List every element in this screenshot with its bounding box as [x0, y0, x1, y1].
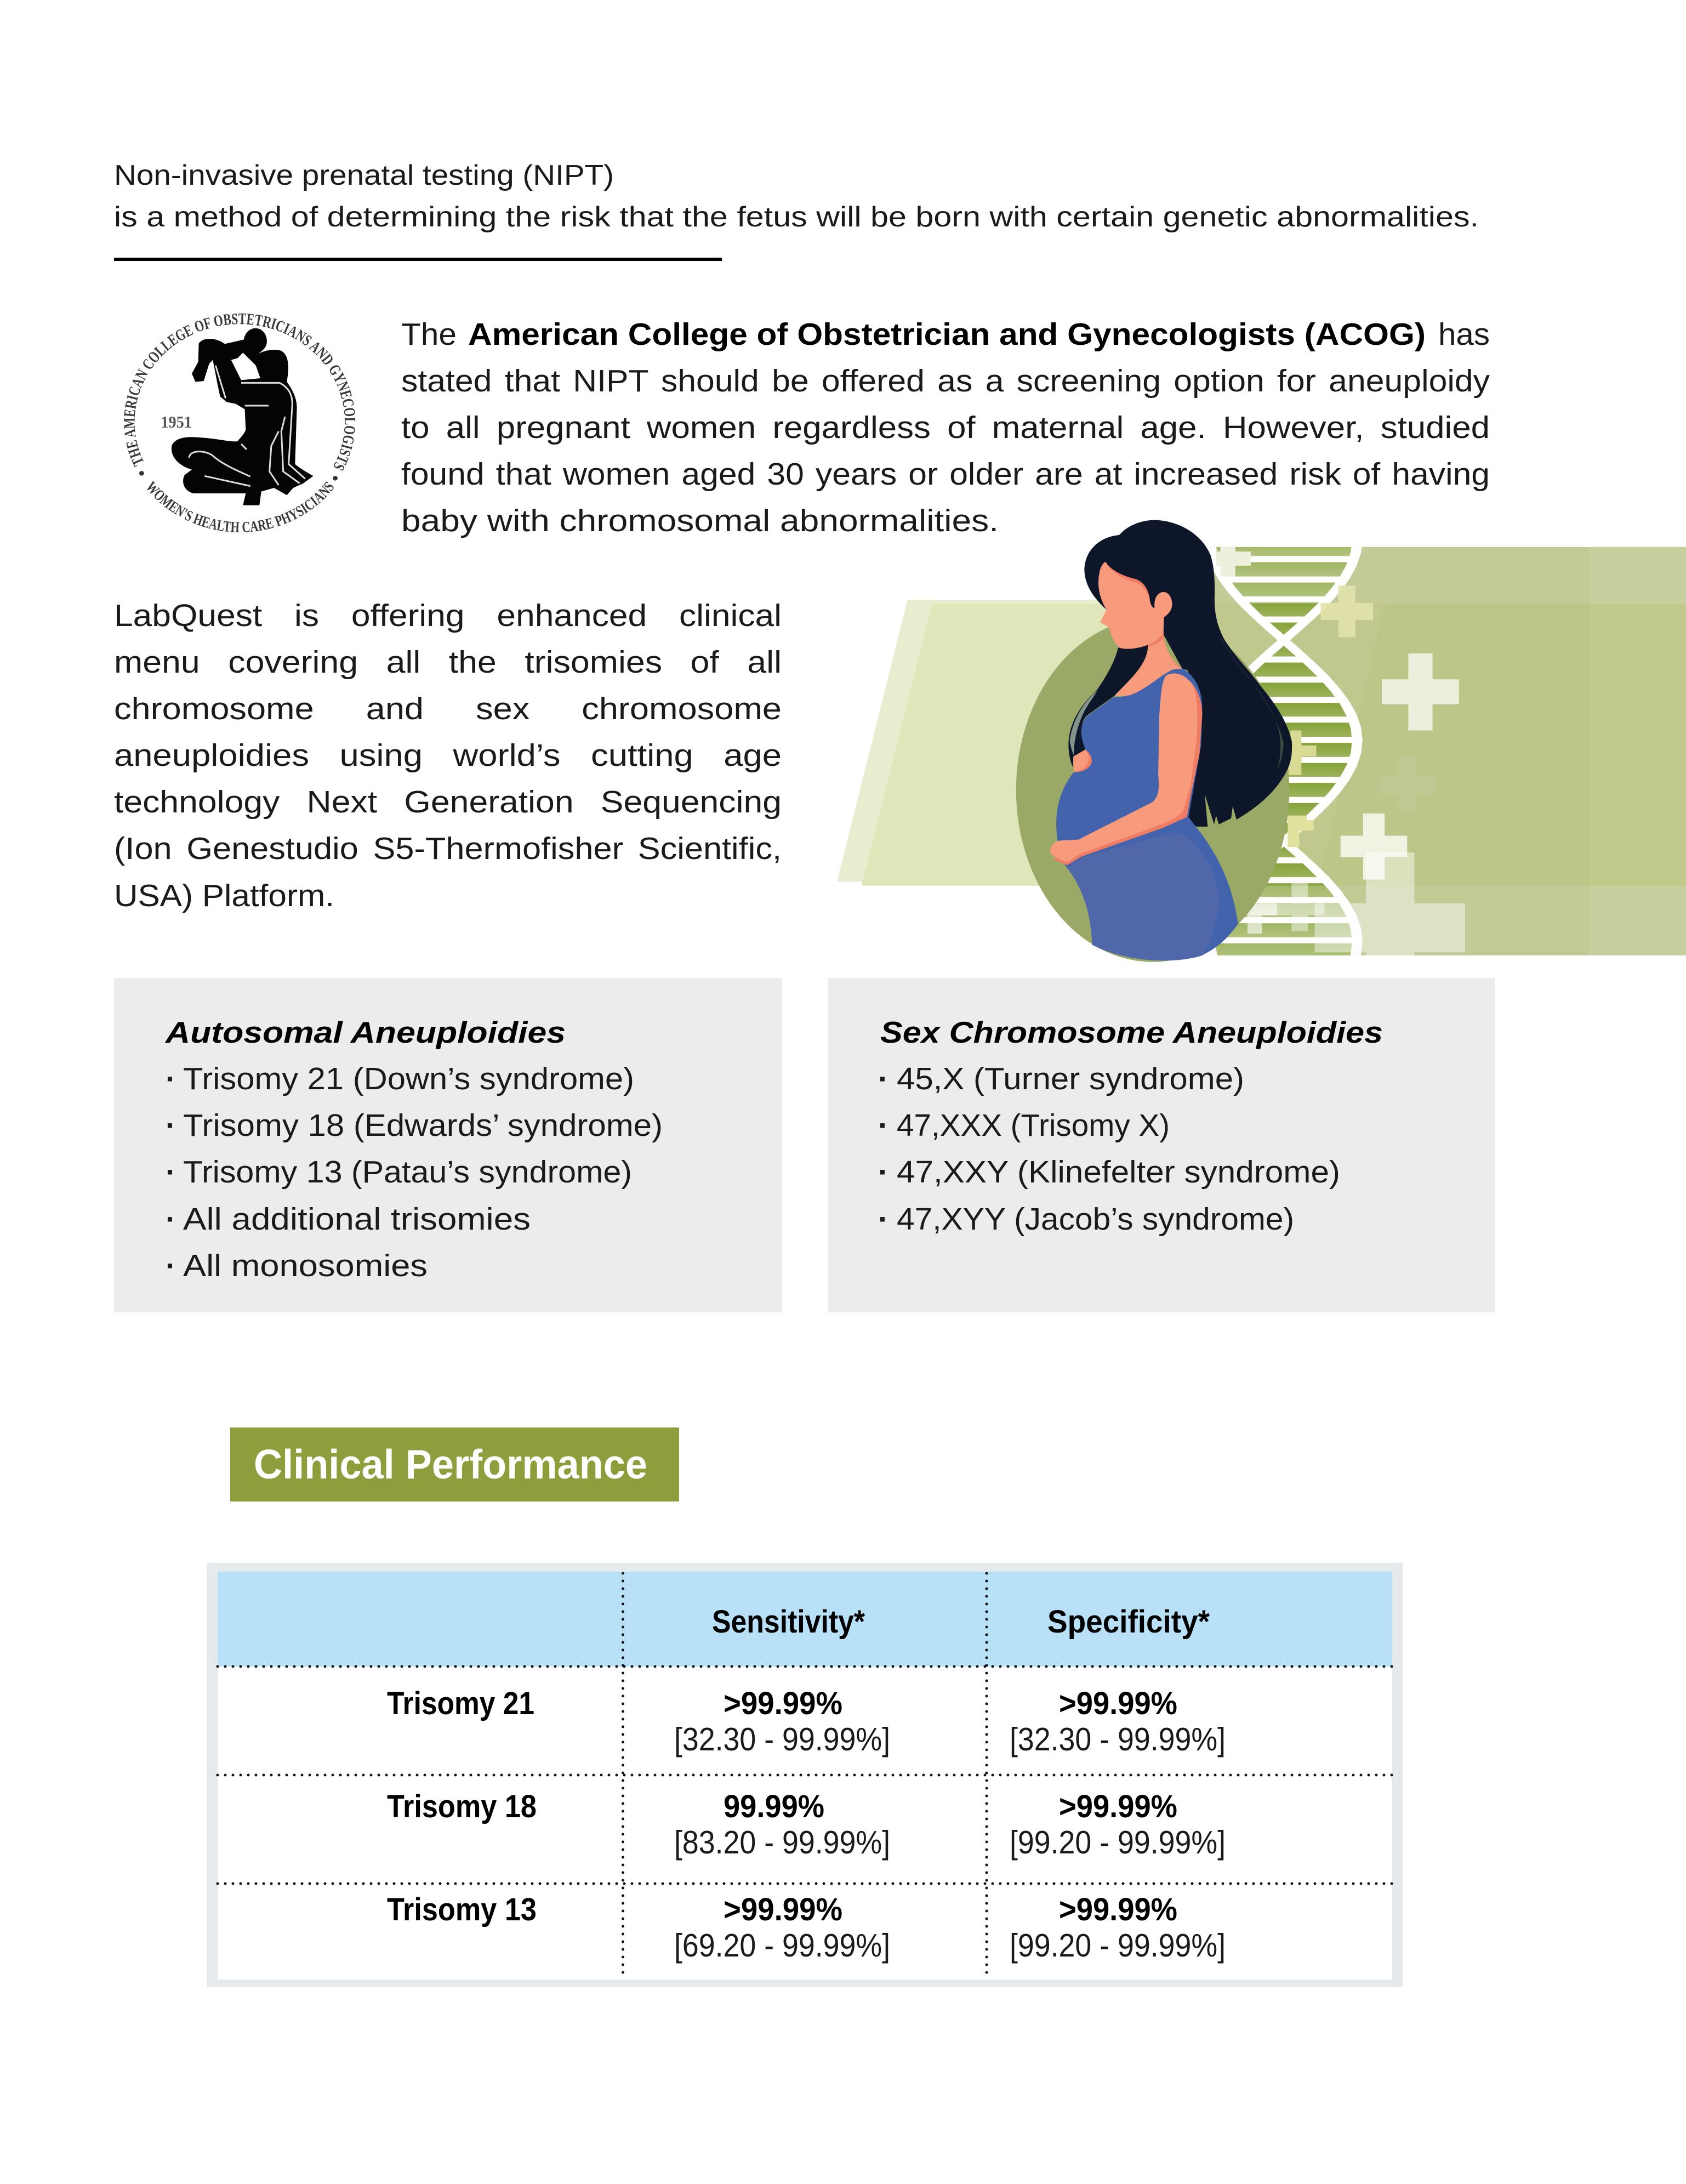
woman: dress and arm — [1050, 668, 1238, 960]
list: sex chromosome: · — [878, 1202, 888, 1237]
paragraph: ACOG statement: The — [401, 317, 457, 352]
row: trisomy 13: [69.20 - 99.99%] — [674, 1927, 890, 1964]
heading rule — [114, 258, 722, 261]
table header: Specificity* — [1047, 1604, 1210, 1640]
heading: autosomal: Autosomal Aneuploidies — [164, 1015, 566, 1049]
paragraph: LabQuest menu — [114, 598, 782, 913]
heading: clinical performance: Clinical Performance — [254, 1441, 647, 1487]
panel: autosomal aneuploidies — [114, 978, 782, 1312]
paragraph: LabQuest menu: aneuploidies using world’s cutting age — [114, 738, 782, 773]
table: clinical performance — [207, 1563, 1403, 1987]
list: sex chromosome: · — [878, 1154, 888, 1190]
list: autosomal: · — [166, 1202, 176, 1237]
row: trisomy 13: Trisomy 13 — [387, 1892, 537, 1927]
row: trisomy 18: [83.20 - 99.99%] — [674, 1824, 890, 1861]
list: sex chromosome — [878, 1061, 1340, 1237]
paragraph: LabQuest menu: chromosome and sex chromosome — [114, 691, 782, 726]
row: trisomy 18: Trisomy 18 — [387, 1789, 537, 1824]
list: autosomal: All additional trisomies — [183, 1202, 531, 1237]
row: trisomy 18: 99.99% — [724, 1789, 824, 1824]
list: autosomal: Trisomy 13 (Patau’s syndrome) — [183, 1154, 632, 1190]
paragraph: LabQuest menu: menu covering all the trisomies of all — [114, 645, 782, 680]
egg-shaped backdrop — [1016, 618, 1289, 962]
row: trisomy 13: >99.99% — [1059, 1892, 1177, 1927]
paragraph: LabQuest menu: technology Next Generation Sequencing — [114, 784, 782, 820]
icon: ACOG seal logo: 1951 — [161, 413, 192, 431]
row: trisomy 18: [99.20 - 99.99%] — [1010, 1824, 1226, 1861]
paragraph: ACOG statement: has — [1438, 317, 1490, 352]
paragraph: ACOG statement: baby with chromosomal abnormalities. — [401, 503, 999, 538]
list: autosomal: All monosomies — [183, 1248, 428, 1283]
row: trisomy 13: >99.99% — [724, 1892, 842, 1927]
list: sex chromosome: · — [878, 1108, 888, 1143]
list: autosomal — [166, 1061, 663, 1283]
row: trisomy 21: [32.30 - 99.99%] — [1010, 1721, 1226, 1758]
background panel: olive block — [1208, 547, 1686, 956]
row: trisomy 21: [32.30 - 99.99%] — [674, 1721, 890, 1758]
table header — [218, 1572, 1392, 1667]
icon: medical crosses — [1216, 547, 1465, 956]
row: trisomy 21: Trisomy 21 — [387, 1686, 534, 1721]
list: sex chromosome: 47,XYY (Jacob’s syndrome) — [897, 1202, 1294, 1237]
list: sex chromosome: 47,XXY (Klinefelter syndrome) — [897, 1154, 1340, 1190]
list: sex chromosome: · — [878, 1061, 888, 1096]
heading: sex chromosome: Sex Chromosome Aneuploidies — [880, 1015, 1383, 1049]
row: trisomy 21: >99.99% — [1059, 1686, 1177, 1721]
paragraph: ACOG statement: to all pregnant women regardless of maternal age. However, studied — [401, 410, 1490, 445]
list: autosomal: · — [166, 1061, 176, 1096]
list: autosomal: Trisomy 21 (Down’s syndrome) — [183, 1061, 634, 1096]
list: autosomal: · — [166, 1154, 176, 1190]
paragraph: LabQuest menu: USA) Platform. — [114, 878, 334, 913]
paragraph: ACOG statement: American College of Obstetrician and Gynecologists (ACOG) — [468, 317, 1426, 352]
row: trisomy 18: >99.99% — [1059, 1789, 1177, 1824]
woman: face, neck, ear and hand — [1073, 562, 1182, 772]
intro text: is a method of determining the risk that the fetus will be born with certain genetic abnormalities. — [114, 201, 1479, 233]
panel: sex chromosome aneuploidies — [828, 978, 1495, 1312]
paragraph: ACOG statement — [401, 317, 1490, 538]
list: sex chromosome: 45,X (Turner syndrome) — [897, 1061, 1244, 1096]
paragraph: LabQuest menu: (Ion Genestudio S5-Thermofisher Scientific, — [114, 831, 782, 866]
paragraph: ACOG statement: stated that NIPT should be offered as a screening option for aneuploidy — [401, 363, 1490, 399]
icon: ACOG seal logo: THE AMERICAN COLLEGE OF OBSTETRICIANS AND GYNECOLOGISTS — [124, 314, 355, 471]
row: trisomy 18 — [387, 1789, 1226, 1861]
paragraph: LabQuest menu: LabQuest is offering enhanced clinical — [114, 598, 782, 633]
list: autosomal: · — [166, 1248, 176, 1283]
table header: Sensitivity* — [712, 1604, 865, 1640]
woman: hair — [1068, 520, 1292, 827]
row: trisomy 21 — [387, 1686, 1226, 1758]
row: trisomy 13 — [387, 1892, 1226, 1964]
intro text — [114, 160, 1479, 233]
background panel: pale green trapezoids — [837, 600, 1389, 885]
paragraph: ACOG statement: found that women aged 30 years or older are at increased risk of having — [401, 457, 1490, 492]
row: trisomy 13: [99.20 - 99.99%] — [1010, 1927, 1226, 1964]
list: sex chromosome: 47,XXX (Trisomy X) — [897, 1108, 1170, 1143]
intro text: Non-invasive prenatal testing (NIPT) — [114, 160, 614, 191]
heading: clinical performance — [230, 1427, 679, 1502]
row: trisomy 21: >99.99% — [724, 1686, 842, 1721]
icon: ACOG seal logo: WOMEN'S HEALTH CARE PHYSICIANS — [147, 480, 334, 532]
illustration: pregnant woman with DNA helix — [837, 520, 1686, 967]
DNA helix — [1208, 547, 1363, 956]
list: autosomal: Trisomy 18 (Edwards’ syndrome) — [183, 1108, 663, 1143]
list: autosomal: · — [166, 1108, 176, 1143]
